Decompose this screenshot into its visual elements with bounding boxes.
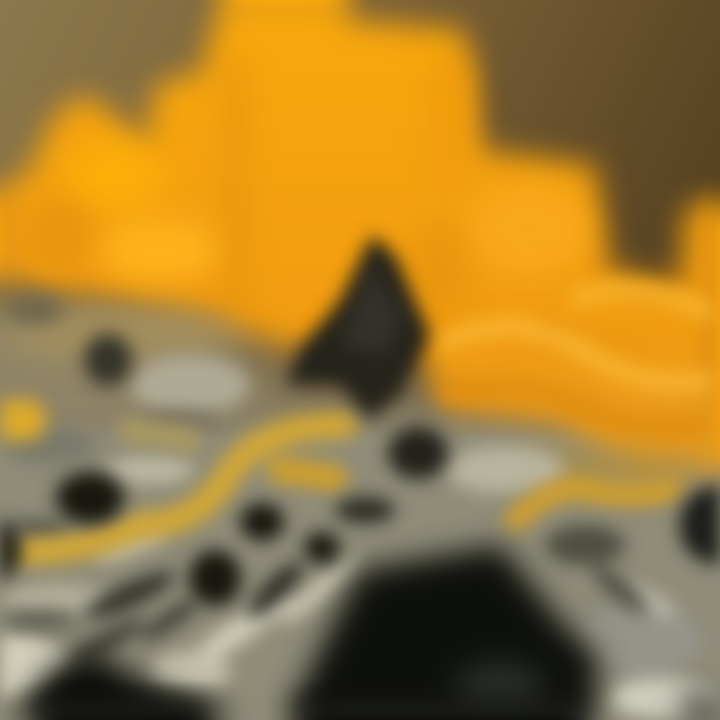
black boulder: large foreground rock (15, 545, 720, 720)
blended edge: orange to rubble transition (0, 307, 705, 488)
boulder base: keeps rocks dark at bottom edge (40, 680, 585, 720)
orange folds: darker and lighter tonal patches (25, 60, 590, 320)
orange bars: stepped blurred mass (0, 0, 720, 470)
orange edge fill: keeps bars solid at frame edges (0, 0, 720, 465)
orange waves: lower right folds (440, 290, 712, 428)
rubble shadows: dark streaks (2, 412, 653, 668)
yellow ribbon: winding streak (0, 400, 670, 552)
black stones: scattered dark blobs (0, 334, 720, 606)
black cone: central peak (285, 235, 430, 420)
lower ground: grey rubble base (0, 310, 720, 720)
rubble highlights: pale speckles (0, 296, 719, 718)
